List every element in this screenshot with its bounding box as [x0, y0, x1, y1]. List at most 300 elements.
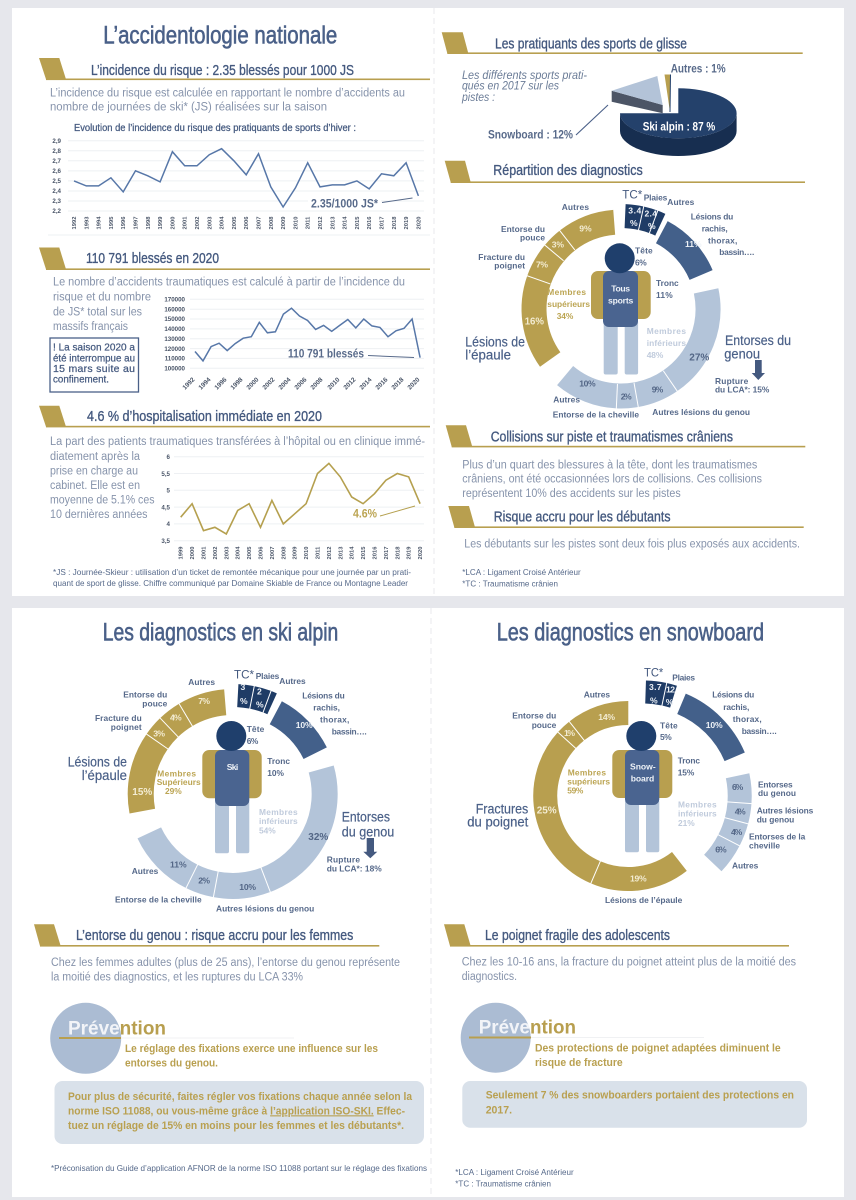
labels: diagnostics snowboard: 6%: [715, 845, 727, 855]
text block: blessures à la tête: [462, 459, 762, 500]
text block: sports pratiqués: pistes :: [461, 92, 495, 104]
labels: diagnostics ski alpin: %: [240, 696, 248, 706]
labels: diagnostics tous sports: 7%: [536, 259, 548, 269]
labels: diagnostics tous sports: 16%: [525, 316, 544, 327]
arc: membres supérieurs: [534, 222, 614, 360]
callout: 4.6%: 4.6%: [353, 508, 377, 520]
labels: diagnostics snowboard: cheville: [749, 840, 780, 850]
panel: conseil réglage: tuez un réglage de 15% en moins pour les femmes et les débutants*.: [68, 1120, 404, 1132]
arrow: rupture du LCA: [752, 360, 765, 380]
labels: diagnostics ski alpin: Membres: [157, 768, 196, 778]
line chart: hospitalisation 1999-2020: 2014: [350, 546, 356, 559]
arc: membres supérieurs: [545, 713, 679, 879]
labels: diagnostics tous sports: %: [630, 218, 638, 228]
line chart: nombre de blessés 1992-2020: 2004: [277, 376, 293, 391]
line chart: incidence du risque 1992-2020: 1993: [84, 216, 90, 229]
labels: diagnostics tous sports: 11%: [685, 239, 702, 249]
line chart: nombre de blessés 1992-2020: 110000: [165, 356, 186, 363]
labels: diagnostics snowboard: 3.7: [649, 682, 662, 692]
callout: 4.6%: [353, 506, 415, 520]
line chart: hospitalisation 1999-2020: 2004: [236, 546, 242, 559]
labels: diagnostics tous sports: l’épaule: [465, 347, 511, 362]
labels: diagnostics snowboard: 25%: [537, 805, 557, 816]
callout: 110 791 blessés: 110 791 blessés: [288, 348, 364, 360]
line chart: incidence du risque 1992-2020: 2,3: [52, 198, 62, 205]
labels: diagnostics ski alpin: 7%: [198, 696, 210, 706]
labels: diagnostics tous sports: Entorse de la cheville: [553, 410, 639, 420]
heading: poignet fragile: Le poignet fragile des adolescents: [485, 927, 670, 944]
labels: diagnostics tous sports: rachis,: [702, 223, 728, 233]
text block: blessures à la tête: crâniens, ont été occasionnées lors de collisions. Ces collisions: [462, 474, 762, 486]
line chart: incidence du risque 1992-2020: 2014: [343, 216, 349, 229]
callout: saison interrompue: 15 mars suite au: [53, 363, 135, 375]
labels: diagnostics ski alpin: TC*: [234, 667, 254, 681]
arc: membres inférieurs: [565, 291, 708, 396]
labels: diagnostics ski alpin: 2: [257, 686, 262, 696]
section: pratiquants des sports de glisse: [442, 32, 803, 156]
line chart: incidence du risque 1992-2020: 2008: [269, 216, 275, 229]
line chart: nombre de blessés 1992-2020: 2014: [358, 376, 374, 391]
panel: conseil réglage: Pour plus de sécurité, faites régler vos fixations chaque année selon la: [68, 1091, 413, 1103]
line chart: incidence du risque 1992-2020: [48, 138, 430, 235]
line chart: nombre de blessés 1992-2020: 2016: [374, 376, 390, 391]
line chart: nombre de blessés 1992-2020: 2018: [390, 376, 406, 391]
labels: diagnostics ski alpin: pouce: [142, 699, 168, 709]
labels: diagnostics tous sports: [465, 187, 791, 420]
text block: part des patients transférés: moyenne de 5.1% ces: [50, 494, 155, 506]
text block: calcul des accidents: Le nombre d’accidents traumatiques est calculé à partir de l’incidence du: [53, 277, 405, 289]
line chart: hospitalisation 1999-2020: 2015: [361, 546, 367, 559]
text block: définition de l'incidence: [50, 88, 405, 114]
labels: diagnostics tous sports: Lésions du: [691, 211, 733, 221]
line chart: incidence du risque 1992-2020: 2,2: [52, 208, 62, 215]
line chart: hospitalisation 1999-2020: 2002: [213, 547, 219, 559]
labels: diagnostics ski alpin: 10%: [239, 882, 256, 892]
line chart: incidence du risque 1992-2020: 2006: [244, 216, 250, 229]
labels: diagnostics ski alpin: Lésions de: [68, 755, 127, 770]
line chart: incidence du risque 1992-2020: 2005: [232, 216, 238, 229]
line chart: nombre de blessés 1992-2020: 1996: [213, 376, 229, 391]
line chart: nombre de blessés 1992-2020: 100000: [164, 366, 186, 372]
callout: 2.35/1000 JS: 2.35/1000 JS*: [311, 198, 378, 210]
heading: répartition: Répartition des diagnostics: [493, 162, 643, 179]
line chart: incidence du risque 1992-2020: 1998: [146, 216, 152, 229]
line chart: hospitalisation 1999-2020: 2001: [202, 546, 208, 559]
labels: diagnostics ski alpin: Ski: [227, 762, 238, 772]
panel: 7 % de protections: Seulement 7 % des snowboarders portaient des protections en: [486, 1090, 794, 1102]
labels: diagnostics snowboard: 14%: [598, 712, 615, 722]
labels: diagnostics snowboard: Membres: [678, 800, 717, 810]
text block: sports pratiqués: Les différents sports prati-: [462, 70, 587, 82]
title: diagnostics en snowboard: Les diagnostics en snowboard: [497, 619, 764, 647]
panel: conseil réglage: norme ISO 11088, ou vous-même grâce à l’application ISO-SKI. Effec-: [68, 1105, 405, 1117]
line chart: incidence du risque 1992-2020: 2003: [207, 216, 213, 229]
line chart: incidence du risque 1992-2020: 2004: [220, 216, 226, 229]
labels: diagnostics ski alpin: 54%: [259, 825, 276, 835]
arc: tronc: [682, 704, 735, 757]
footnote: abréviations page 2: [455, 1167, 574, 1189]
labels: diagnostics ski alpin: du LCA*: 18%: [327, 864, 382, 874]
callout: saison interrompue: confinement.: [53, 374, 109, 386]
text block: réglage des fixations: Le réglage des fixations exerce une influence sur les: [125, 1043, 378, 1055]
labels: diagnostics snowboard: [467, 666, 814, 905]
line chart: hospitalisation 1999-2020: 2000: [190, 547, 196, 559]
labels: diagnostics tous sports: pouce: [520, 233, 545, 243]
labels: diagnostics snowboard: 10%: [706, 720, 723, 730]
labels: diagnostics snowboard: Membres: [568, 768, 606, 778]
line chart: incidence du risque 1992-2020: 1996: [121, 216, 127, 229]
labels: diagnostics ski alpin: Autres: [188, 677, 215, 687]
line chart: hospitalisation 1999-2020: 2009: [293, 546, 299, 559]
title: L'accidentologie nationale: L’accidentologie nationale: [103, 21, 337, 49]
footnote: abréviations page 2: *TC : Traumatisme crânien: [455, 1179, 551, 1189]
line chart: nombre de blessés 1992-2020: 130000: [164, 336, 186, 343]
text block: protections adaptées: [535, 1042, 781, 1069]
section: collisions sur piste: [446, 425, 805, 500]
labels: diagnostics tous sports: Fracture du: [478, 252, 525, 262]
line chart: incidence du risque 1992-2020: 1999: [158, 216, 164, 229]
pie chart: sports de glisse: Ski alpin : 87 %: [643, 122, 715, 134]
heading: 4.6 % d'hospitalisation: 4.6 % d’hospitalisation immédiate en 2020: [87, 408, 322, 425]
text block: calcul des accidents: [53, 277, 405, 333]
line chart: hospitalisation 1999-2020: 2013: [338, 546, 344, 559]
labels: diagnostics snowboard: Autres: [732, 861, 759, 871]
line chart: incidence du risque 1992-2020: 2,8: [52, 148, 62, 155]
line chart: incidence du risque 1992-2020: 2019: [404, 216, 410, 229]
prévention: protections de poignet: [455, 1003, 807, 1189]
donut chart: snowboard: [467, 666, 814, 905]
line chart: hospitalisation 1999-2020: 2011: [316, 546, 322, 559]
labels: diagnostics ski alpin: 2%: [198, 875, 210, 885]
labels: diagnostics tous sports: genou: [724, 346, 760, 361]
line chart: incidence du risque 1992-2020: 2,5: [52, 178, 62, 185]
labels: diagnostics ski alpin: 15%: [132, 787, 152, 798]
panel: 7 % de protections: 2017.: [486, 1104, 512, 1116]
text block: définition de l'incidence: nombre de journées de ski* (JS) réalisées sur la saison: [50, 102, 327, 114]
chart heading: Evolution de l’incidence du risque des pratiquants de sports d’hiver :: [74, 123, 356, 134]
text block: définition de l'incidence: L’incidence du risque est calculée en rapportant le nombre d’accidents au: [50, 88, 405, 100]
labels: diagnostics tous sports: Tronc: [656, 278, 679, 288]
line chart: nombre de blessés 1992-2020: 150000: [164, 316, 186, 323]
line chart: incidence du risque 1992-2020: 2015: [355, 216, 361, 229]
labels: diagnostics ski alpin: Membres: [259, 807, 298, 817]
line chart: hospitalisation 1999-2020: 4: [167, 521, 171, 528]
labels: diagnostics snowboard: Entorses de la: [749, 831, 806, 841]
text block: part des patients transférés: diatement après la: [50, 451, 141, 463]
text block: débutants exposés: Les débutants sur les pistes sont deux fois plus exposés aux accidents.: [464, 539, 800, 551]
arc: membres inférieurs: [713, 776, 740, 863]
heading: 4.6 % d'hospitalisation: [39, 406, 430, 427]
labels: diagnostics ski alpin: 32%: [308, 832, 328, 843]
heading: entorse du genou: [34, 924, 379, 947]
prévention: fixations: [50, 1003, 427, 1173]
labels: diagnostics snowboard: %: [650, 695, 658, 705]
labels: diagnostics ski alpin: Entorse de la cheville: [115, 894, 202, 904]
labels: diagnostics ski alpin: Autres: [132, 866, 159, 876]
labels: diagnostics ski alpin: 11%: [170, 859, 187, 869]
labels: diagnostics snowboard: 15%: [678, 768, 695, 778]
icon: cercle prévention: [461, 1003, 531, 1073]
labels: diagnostics ski alpin: Entorse du: [123, 689, 167, 699]
line chart: incidence du risque 1992-2020: 1995: [109, 216, 115, 229]
line chart: hospitalisation 1999-2020: [161, 454, 424, 559]
labels: diagnostics ski alpin: bassin….: [332, 727, 367, 737]
labels: diagnostics ski alpin: 10%: [296, 720, 313, 730]
labels: diagnostics snowboard: Lésions du: [712, 689, 754, 699]
line chart: nombre de blessés 1992-2020: 1992: [181, 376, 197, 391]
labels: diagnostics tous sports: 3%: [552, 239, 564, 249]
labels: diagnostics tous sports: 27%: [689, 353, 709, 364]
labels: diagnostics tous sports: du LCA*: 15%: [715, 385, 770, 395]
line chart: nombre de blessés 1992-2020: 140000: [164, 326, 186, 333]
arc: tête: [625, 216, 660, 225]
arc: membres supérieurs: [141, 702, 225, 811]
labels: diagnostics tous sports: 2.4: [644, 208, 657, 218]
labels: diagnostics snowboard: 1.2: [666, 684, 675, 694]
line chart: nombre de blessés 1992-2020: 160000: [164, 306, 186, 313]
line chart: nombre de blessés 1992-2020: 120000: [164, 346, 186, 353]
labels: diagnostics snowboard: 4%: [731, 827, 743, 837]
labels: diagnostics tous sports: 9%: [579, 223, 592, 233]
line chart: incidence du risque 1992-2020: 2,9: [52, 138, 62, 145]
line chart: incidence du risque 1992-2020: 2018: [392, 216, 398, 229]
heading: pratiquants: [442, 32, 803, 54]
labels: diagnostics snowboard: Lésions de l’épaule: [605, 895, 683, 905]
callout: saison interrompue: ! La saison 2020 a: [53, 342, 135, 354]
text block: blessures à la tête: représentent 10% des accidents sur les pistes: [462, 488, 681, 500]
line chart: incidence du risque 1992-2020: 2016: [367, 216, 373, 229]
labels: diagnostics ski alpin: 29%: [165, 786, 182, 796]
line chart: hospitalisation 1999-2020: 5,5: [161, 471, 171, 478]
footnote: abréviations page 2: *LCA : Ligament Croisé Antérieur: [455, 1167, 574, 1177]
labels: diagnostics ski alpin: 3: [240, 682, 246, 692]
labels: diagnostics snowboard: 1%: [564, 728, 575, 738]
text block: calcul des accidents: risque et du nombre: [53, 292, 151, 304]
section: incidence du risque: [39, 58, 430, 235]
line chart: incidence du risque 1992-2020: 2000: [170, 217, 176, 229]
line chart: nombre de blessés 1992-2020: 2006: [293, 376, 309, 391]
line chart: incidence du risque 1992-2020: 2013: [330, 216, 336, 229]
callout: saison interrompue: été interrompue au: [53, 352, 135, 364]
labels: diagnostics tous sports: Entorses du: [725, 333, 791, 348]
labels: diagnostics tous sports: 11%: [656, 290, 673, 300]
heading: répartition: [445, 161, 805, 183]
heading: incidence du risque: L’incidence du risque : 2.35 blessés pour 1000 JS: [91, 62, 354, 79]
labels: diagnostics tous sports: 10%: [579, 379, 596, 389]
line chart: hospitalisation 1999-2020: 2019: [407, 546, 413, 559]
labels: diagnostics ski alpin: Plaies: [256, 671, 280, 681]
icon: silhouette tous sports: [591, 243, 651, 374]
labels: diagnostics snowboard: du genou: [758, 788, 796, 798]
section: risque accru pour les débutants: [448, 506, 804, 551]
section: répartition des diagnostics: [445, 161, 805, 420]
labels: diagnostics ski alpin: [68, 667, 394, 914]
donut chart: ski alpin: [68, 667, 394, 914]
line chart: hospitalisation 1999-2020: 2016: [372, 546, 378, 559]
labels: diagnostics ski alpin: 3%: [153, 729, 165, 739]
labels: diagnostics tous sports: Tous: [611, 284, 630, 294]
footnote: abréviations page 1: [462, 567, 581, 589]
labels: diagnostics ski alpin: 6%: [247, 736, 259, 746]
labels: diagnostics snowboard: bassin….: [742, 726, 777, 736]
line chart: nombre de blessés 1992-2020: 1998: [229, 376, 245, 391]
labels: diagnostics ski alpin: Rupture: [327, 855, 360, 865]
labels: diagnostics snowboard: 19%: [630, 874, 647, 884]
labels: diagnostics snowboard: board: [631, 774, 654, 784]
line chart: incidence du risque 1992-2020: 2012: [318, 217, 324, 229]
footnote: AFNOR: *Préconisation du Guide d’application AFNOR de la norme ISO 11088 portant sur le réglage des fixations: [51, 1163, 427, 1173]
line chart: hospitalisation 1999-2020: 2010: [304, 547, 310, 559]
text block: calcul des accidents: massifs français: [53, 321, 128, 333]
labels: diagnostics tous sports: bassin….: [719, 247, 754, 257]
line chart: incidence du risque 1992-2020: 2,4: [52, 188, 62, 195]
text block: part des patients transférés: cabinet. Elle est en: [50, 480, 140, 492]
labels: diagnostics ski alpin: du genou: [342, 825, 394, 840]
arc: membres inférieurs: [149, 769, 325, 886]
line chart: hospitalisation 1999-2020: 6: [167, 454, 171, 461]
text block: protections adaptées: risque de fracture: [535, 1057, 623, 1069]
labels: diagnostics tous sports: Rupture: [715, 376, 749, 386]
labels: diagnostics ski alpin: 4%: [170, 713, 182, 723]
arc: tronc: [276, 713, 315, 753]
callout: 2.35/1000 JS: [308, 196, 412, 210]
line chart: hospitalisation 1999-2020: 2008: [281, 546, 287, 559]
text block: calcul des accidents: de JS* total sur les: [53, 306, 142, 318]
footnote: abréviations page 1: *TC : Traumatisme crânien: [462, 579, 558, 589]
line chart: hospitalisation 1999-2020: 2018: [395, 546, 401, 559]
callout: saison interrompue: [50, 338, 138, 392]
line chart: hospitalisation 1999-2020: 2007: [270, 547, 276, 559]
arc: tronc: [662, 232, 701, 275]
line chart: hospitalisation 1999-2020: 5: [167, 488, 171, 495]
heading: collisions: Collisions sur piste et traumatismes crâniens: [491, 429, 733, 446]
line chart: hospitalisation 1999-2020: 2006: [258, 546, 264, 559]
labels: diagnostics ski alpin: Tronc: [267, 756, 290, 766]
footnote: journée-skieur: [53, 567, 411, 588]
section: poignet des adolescents: [444, 924, 796, 983]
heading: poignet fragile: [444, 924, 789, 947]
line chart: nombre de blessés 1992-2020: 2020: [406, 376, 422, 391]
labels: diagnostics tous sports: Membres: [547, 287, 586, 297]
labels: diagnostics snowboard: rachis,: [723, 702, 749, 712]
text block: femmes adultes: Chez les femmes adultes (plus de 25 ans), l’entorse du genou représente: [51, 957, 400, 969]
labels: diagnostics snowboard: du genou: [757, 815, 794, 825]
labels: diagnostics ski alpin: inférieurs: [259, 816, 298, 826]
line chart: incidence du risque 1992-2020: 2020: [416, 217, 422, 229]
labels: diagnostics ski alpin: Lésions du: [302, 690, 345, 700]
heading: prévention: Prévention: [68, 1018, 166, 1039]
labels: diagnostics snowboard: %: [666, 697, 674, 707]
labels: diagnostics tous sports: thorax,: [708, 235, 737, 245]
labels: diagnostics tous sports: Entorse du: [501, 224, 545, 234]
text block: réglage des fixations: [125, 1043, 378, 1070]
line chart: hospitalisation 1999-2020: 1999: [179, 546, 185, 559]
labels: diagnostics snowboard: Entorses: [758, 779, 793, 789]
labels: diagnostics ski alpin: thorax,: [320, 715, 349, 725]
labels: diagnostics tous sports: 6%: [635, 257, 647, 267]
footnote: journée-skieur: *JS : Journée-Skieur : utilisation d’un ticket de remontée mécanique pour une journée par un prati-: [53, 567, 411, 577]
labels: diagnostics snowboard: Fractures: [476, 801, 529, 816]
heading: collisions: [446, 425, 805, 447]
line chart: incidence du risque 1992-2020: 2017: [380, 217, 386, 229]
line chart: incidence du risque 1992-2020: 1992: [72, 217, 78, 229]
labels: diagnostics tous sports: inférieurs: [647, 338, 686, 348]
text block: 10-16 ans: diagnostics.: [462, 971, 517, 983]
labels: diagnostics snowboard: thorax,: [733, 714, 762, 724]
line chart: incidence du risque 1992-2020: 2001: [183, 216, 189, 229]
labels: diagnostics ski alpin: 10%: [267, 768, 285, 778]
text block: 10-16 ans: [462, 957, 796, 983]
footnote: journée-skieur: quant de sport de glisse. Chiffre communiqué par Domaine Skiable de France ou Montagne Leader: [53, 578, 408, 588]
line chart: hospitalisation 1999-2020: 3,5: [161, 538, 171, 545]
labels: diagnostics snowboard: 21%: [678, 818, 695, 828]
line chart: hospitalisation 1999-2020: 2017: [384, 547, 390, 559]
labels: diagnostics tous sports: Autres: [667, 197, 695, 207]
labels: diagnostics snowboard: pouce: [532, 720, 557, 730]
text block: blessures à la tête: Plus d’un quart des blessures à la tête, dont les traumatismes: [462, 459, 758, 471]
section: hospitalisation immédiate: [39, 406, 430, 559]
labels: diagnostics ski alpin: poignet: [111, 722, 142, 732]
text block: réglage des fixations: entorses du genou.: [125, 1058, 218, 1070]
line chart: incidence du risque 1992-2020: 1997: [134, 217, 140, 229]
arc: tête: [646, 692, 674, 697]
heading: prévention: Prévention: [479, 1017, 576, 1038]
label: autres 1%: Autres : 1%: [671, 63, 726, 75]
icon: silhouette snowboard: [612, 721, 672, 852]
labels: diagnostics tous sports: Autres: [553, 394, 580, 404]
labels: diagnostics tous sports: supérieurs: [547, 299, 590, 309]
line chart: nombre de blessés 1992-2020: 2002: [261, 376, 277, 391]
text block: part des patients transférés: [50, 436, 425, 521]
labels: diagnostics ski alpin: l’épaule: [82, 768, 127, 783]
line chart: incidence du risque 1992-2020: 2009: [281, 216, 287, 229]
labels: diagnostics tous sports: poignet: [494, 261, 525, 271]
heading: débutants: Risque accru pour les débutants: [494, 509, 670, 526]
labels: diagnostics tous sports: 34%: [557, 311, 574, 321]
callout: 110 791 blessés: [288, 348, 414, 360]
labels: diagnostics tous sports: 2%: [621, 391, 632, 401]
heading: 110 791 blessés: [39, 248, 430, 270]
line chart: incidence du risque 1992-2020: 2007: [256, 217, 262, 229]
labels: diagnostics ski alpin: Entorses: [342, 810, 390, 825]
labels: diagnostics tous sports: 9%: [652, 384, 664, 394]
labels: diagnostics snowboard: 5%: [660, 732, 672, 742]
heading: incidence du risque: [39, 58, 430, 80]
heading: pratiquants: Les pratiquants des sports de glisse: [495, 36, 687, 52]
line chart: incidence du risque 1992-2020: 2002: [195, 217, 201, 229]
line chart: incidence du risque 1992-2020: 2,6: [52, 168, 62, 175]
labels: diagnostics ski alpin: Autres: [279, 676, 306, 686]
labels: diagnostics tous sports: Autres lésions du genou: [652, 407, 750, 417]
text block: part des patients transférés: prise en charge au: [50, 466, 138, 478]
labels: diagnostics snowboard: Tronc: [678, 755, 700, 765]
labels: diagnostics ski alpin: Autres lésions du genou: [216, 904, 314, 914]
line chart: hospitalisation 1999-2020: 2005: [247, 546, 253, 559]
labels: diagnostics tous sports: Tête: [635, 245, 653, 255]
text block: sports pratiqués: qués en 2017 sur les: [462, 81, 559, 93]
line chart: nombre de blessés 1992-2020: 2010: [326, 376, 342, 391]
line chart: hospitalisation 1999-2020: 2012: [327, 547, 333, 559]
section: entorse du genou: [34, 924, 400, 984]
labels: diagnostics snowboard: Entorse du: [512, 711, 556, 721]
labels: diagnostics snowboard: Autres lésions: [757, 805, 814, 815]
labels: diagnostics snowboard: supérieurs: [567, 777, 610, 787]
labels: diagnostics snowboard: 59%: [567, 786, 584, 796]
line chart: incidence du risque 1992-2020: 2010: [293, 217, 299, 229]
arc: tête: [238, 696, 272, 704]
text block: part des patients transférés: La part des patients traumatiques transférées à l’hôpital ou en clinique immé-: [50, 436, 425, 448]
labels: diagnostics snowboard: 4%: [735, 807, 746, 817]
